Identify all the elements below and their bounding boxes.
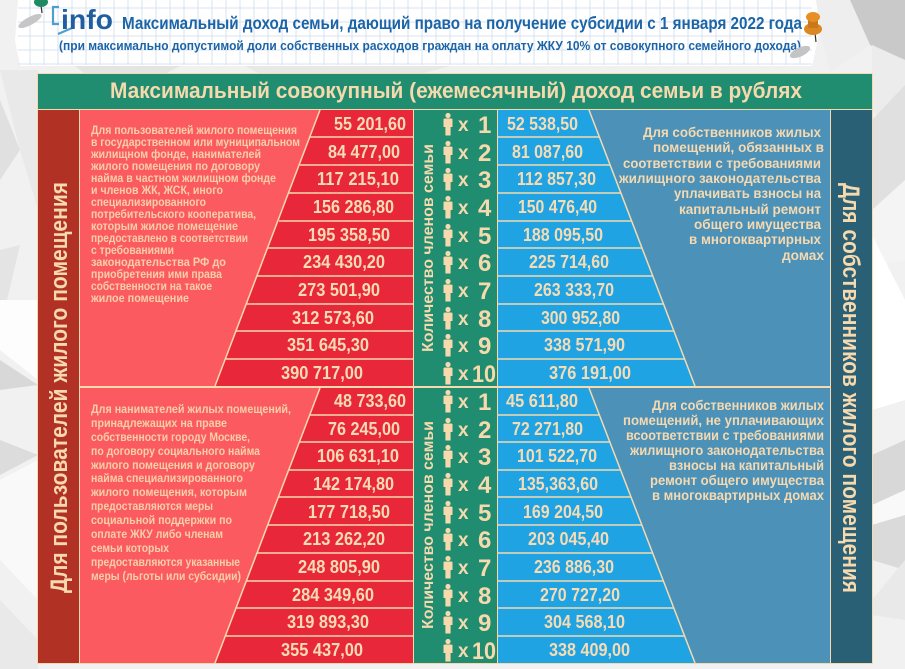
text: tenants block 1 description: Для пользователей жилого помещения [91,123,297,137]
text: owners block 2 description: Для собственников жилых [652,398,824,413]
multipliers 1: 10 [472,361,496,388]
red pyramid 2: 248 805,90 [298,557,380,577]
text: tenants block 1 description: найма в частном жилищном фонде [91,171,276,185]
blue pyramid 2: 72 271,80 [512,419,583,439]
text: tenants block 2 description: жилого помещения и договору [90,458,255,472]
sidebar: owners [831,110,872,663]
text: tenants block 2 description: предоставляются указанные [91,555,240,569]
multipliers 2: 9 [478,610,491,637]
text: tenants block 1 description: собственности на такое [91,279,212,293]
label: family members 1: Количество членов семьи [420,144,437,352]
multipliers 2: 8 [478,583,491,610]
label: family members 2: Количество членов семьи [420,421,437,629]
blue pyramid 2: 338 409,00 [549,640,630,660]
multipliers 2: x [458,558,469,579]
multipliers 1: 4 [478,195,492,222]
text: tenants block 1 description: которым жилое помещение [91,219,238,233]
red pyramid 1: 195 358,50 [308,225,390,245]
heading band [38,74,872,109]
text: tenants block 1 description: предоставлено в соответствии [91,231,248,245]
text: tenants block 2 description: меры (льготы или субсидии) [91,569,241,583]
multipliers 1: x [458,198,469,219]
red pyramid 2: 355 437,00 [281,640,363,660]
text: owners block 1 description: капитальный ремонт [679,202,821,217]
red pyramid 1: 234 430,20 [303,252,385,272]
sidebar: owners: Для собственников жилого помещения [837,183,864,593]
text: tenants block 2 description: Для нанимателей жилых помещений, [91,402,291,416]
text: tenants block 2 description [90,402,291,583]
multipliers 2: 10 [472,638,496,665]
multipliers 2: 5 [478,500,491,527]
text: tenants block 2 description: оплате ЖКУ либо членам [91,527,223,541]
blue pyramid 2: 45 611,80 [506,391,578,411]
multipliers 2: x [458,447,469,468]
blue pyramid 2: 169 204,50 [523,502,603,522]
text: tenants block 1 description [90,123,300,305]
blue pyramid 1: 188 095,50 [523,225,603,245]
multipliers 1: x [458,281,469,302]
blue pyramid 2: 135,363,60 [518,474,598,494]
text: tenants block 1 description: жилого помещения по договору [90,159,260,173]
heading band: Максимальный совокупный (ежемесячный) доход семьи в рублях [110,78,803,103]
red pyramid 1: 351 645,30 [287,335,369,355]
panel: tenants block 2 [80,388,413,663]
text: owners block 2 description [623,398,824,503]
text: tenants block 2 description: социальной поддержки по [91,513,232,527]
panel: family size column 2 [414,388,497,665]
text: owners block 2 description: взносы на капитальный [669,458,824,473]
multipliers 1: x [458,170,469,191]
text: owners block 1 description [618,125,824,263]
text: tenants block 2 description: по договору социального найма [91,444,260,458]
text: tenants block 1 description: жилое помещение [90,291,189,305]
red pyramid 1: 84 477,00 [328,142,400,162]
red pyramid 2: 213 262,20 [303,529,385,549]
red pyramid 2: 48 733,60 [334,391,406,411]
text: tenants block 1 description: жилищном фонде, нанимателей [90,147,261,161]
blue pyramid 1: 376 191,00 [549,363,631,383]
multipliers 2: x [458,586,469,607]
blue pyramid 1: 225 714,60 [529,252,609,272]
red pyramid 2: 319 893,30 [287,612,369,632]
red pyramid 1: 117 215,10 [317,169,399,189]
blue pyramid 2: 304 568,10 [544,612,625,632]
multipliers 1: 9 [478,333,491,360]
red pyramid 1: 273 501,90 [298,280,380,300]
multipliers 1: 2 [478,140,491,167]
multipliers 1: 7 [478,278,491,305]
red pyramid 1: 55 201,60 [334,114,406,134]
multipliers 1: x [458,253,469,274]
text: tenants block 2 description: жилого помещения, которым [90,485,247,499]
text: owners block 1 description: домах [782,248,824,263]
blue pyramid 2 [498,388,695,663]
title: Максимальный доход семьи, дающий право на получение субсидии с 1 января 2022 года [122,13,802,33]
text: owners block 2 description: в многоквартирных домах [652,488,824,503]
text: tenants block 2 description: найма специализированного [91,471,243,485]
multipliers 1: 1 [478,112,491,139]
multipliers 2: x [458,530,469,551]
multipliers 2: 7 [478,555,491,582]
multipliers 1: x [458,336,469,357]
red pyramid 2: 76 245,00 [328,419,400,439]
blue pyramid 1: 81 087,60 [512,142,583,162]
multipliers 2: x [458,503,469,524]
text: owners block 1 description: общего имущества [694,217,821,232]
red pyramid 2: 177 718,50 [308,502,390,522]
text: tenants block 1 description: приобретения ими права [91,267,222,281]
multipliers 2: 1 [478,389,491,416]
red pyramid 2: 106 631,10 [317,446,399,466]
text: owners block 1 description: жилищного законодательства [618,171,821,186]
icon: green pin [17,0,48,31]
panel: owners block 2 [498,388,830,663]
panel: family size column 1 [414,110,497,388]
multipliers 2: x [458,392,469,413]
multipliers 1: 8 [478,306,491,333]
subtitle: (при максимально допустимой доли собственных расходов граждан на оплату ЖКУ 10% от совокупного семейного дохода) [59,38,801,53]
red pyramid 1: 156 286,80 [313,197,394,217]
red pyramid 1: 390 717,00 [281,363,363,383]
multipliers 2: 6 [478,527,491,554]
blue pyramid 1: 263 333,70 [534,280,614,300]
blue pyramid 1: 300 952,80 [541,308,620,328]
text: owners block 1 description: помещений, обязанных в [653,140,824,155]
blue pyramid 1: 150 476,40 [518,197,597,217]
blue pyramid 2: 203 045,40 [528,529,609,549]
multipliers 2: x [458,420,469,441]
red pyramid 2: 284 349,60 [292,585,374,605]
blue pyramid 1: 338 571,90 [544,335,625,355]
multipliers 2: x [458,475,469,496]
blue pyramid 1 [498,110,695,386]
multipliers 1: 6 [478,250,491,277]
red pyramid 2 [215,388,413,663]
logo: info: info [61,4,113,35]
sidebar: tenants [38,110,79,663]
text: tenants block 1 description: с требованиями [91,243,174,257]
text: tenants block 2 description: собственности городу Москве, [91,430,250,444]
note paper with grid [15,0,820,66]
multipliers 2 [458,389,496,665]
text: owners block 2 description: всоответствии с требованиями [626,428,824,443]
multipliers 1: 3 [478,167,491,194]
red pyramid 1 [215,110,413,386]
text: tenants block 2 description: семьи которых [91,541,169,555]
blue pyramid 1: 112 857,30 [517,169,596,189]
text: owners block 1 description: уплачивать взносы на [674,186,821,201]
panel: owners block 1 [498,110,830,386]
icon: orange pin [788,12,822,61]
blue pyramid 2: 236 886,30 [534,557,614,577]
text: owners block 1 description: в многоквартирных [689,232,821,247]
icons: people 2 [444,390,452,662]
multipliers 1: x [458,143,469,164]
blue pyramid 1: 52 538,50 [507,114,578,134]
text: owners block 2 description: жилищного законодательства [629,443,824,458]
multipliers 2: 2 [478,417,491,444]
text: tenants block 2 description: принадлежащих на праве [91,416,227,430]
red pyramid 2: 142 174,80 [313,474,394,494]
multipliers 1: 5 [478,223,491,250]
text: owners block 2 description: помещений, не уплачивающих [623,413,824,428]
text: tenants block 1 description: специализированного [91,195,206,209]
multipliers 2: x [458,613,469,634]
multipliers 2: 4 [478,472,492,499]
multipliers 1 [458,112,496,388]
blue pyramid 2: 270 727,20 [540,585,620,605]
panel: tenants block 1 [80,110,413,386]
multipliers 1: x [458,115,469,136]
text: owners block 1 description: Для собственников жилых [643,125,821,140]
text: owners block 2 description: ремонт общего имущества [650,473,824,488]
icons: people 1 [444,113,452,385]
multipliers 1: x [458,226,469,247]
blue pyramid 2: 101 522,70 [517,446,597,466]
multipliers 2: x [458,641,469,662]
text: tenants block 1 description: и членов ЖК, ЖСК, иного [91,183,223,197]
text: tenants block 1 description: законодательства РФ до [91,255,226,269]
text: owners block 1 description: соответствии с требованиями [623,156,821,171]
text: tenants block 1 description: потребительского кооператива, [91,207,256,221]
multipliers 2: 3 [478,444,491,471]
sidebar: tenants: Для пользователей жилого помещения [46,182,73,593]
text: tenants block 1 description: в государственном или муниципальном [91,135,300,149]
multipliers 1: x [458,364,469,385]
red pyramid 1: 312 573,60 [292,308,374,328]
text: tenants block 2 description: предоставляются меры [91,499,213,513]
multipliers 1: x [458,309,469,330]
